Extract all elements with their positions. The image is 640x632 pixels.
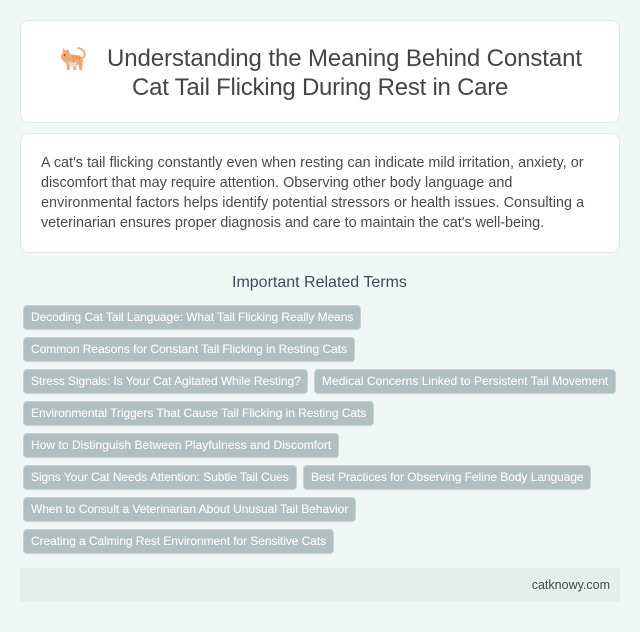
tag: Medical Concerns Linked to Persistent Tail Movement [322, 374, 608, 388]
tag: Creating a Calming Rest Environment for Sensitive Cats [31, 534, 326, 548]
description text: A cat's tail flicking constantly even when resting can indicate mild irritation, anxiety, or [41, 155, 584, 171]
tag: Common Reasons for Constant Tail Flicking in Resting Cats [31, 342, 347, 356]
tag [314, 369, 616, 394]
tag [23, 529, 334, 554]
tag list [23, 305, 616, 554]
description text: environmental factors helps identify potential stressors or health issues. Consulting a [41, 195, 584, 211]
footer bar [20, 568, 620, 602]
section heading: Important Related Terms [232, 274, 407, 291]
panel: description card [20, 133, 620, 253]
tag [23, 401, 374, 426]
tag: Environmental Triggers That Cause Tail Flicking in Resting Cats [31, 406, 366, 420]
tag: Stress Signals: Is Your Cat Agitated While Resting? [31, 374, 301, 388]
tag [23, 337, 355, 362]
tag: Decoding Cat Tail Language: What Tail Flicking Really Means [31, 310, 353, 324]
tag [23, 369, 308, 394]
description text: veterinarian ensures proper diagnosis and care to maintain the cat's well-being. [41, 215, 544, 231]
title line 2: Cat Tail Flicking During Rest in Care [132, 74, 508, 101]
footer text: catknowy.com [532, 578, 610, 592]
tag [303, 465, 591, 490]
tag [23, 433, 339, 458]
tag [23, 497, 356, 522]
icon: cat [61, 47, 86, 70]
tag: When to Consult a Veterinarian About Unusual Tail Behavior [31, 502, 348, 516]
tag: How to Distinguish Between Playfulness and Discomfort [31, 438, 331, 452]
panel: title card [20, 20, 620, 123]
title: Understanding the Meaning Behind Constant [107, 45, 582, 72]
description text [41, 155, 584, 231]
tag: Signs Your Cat Needs Attention: Subtle Tail Cues [31, 470, 289, 484]
description text: discomfort that may require attention. Observing other body language and [41, 175, 512, 191]
tag [23, 305, 361, 330]
tag: Best Practices for Observing Feline Body Language [311, 470, 584, 484]
tag [23, 465, 297, 490]
